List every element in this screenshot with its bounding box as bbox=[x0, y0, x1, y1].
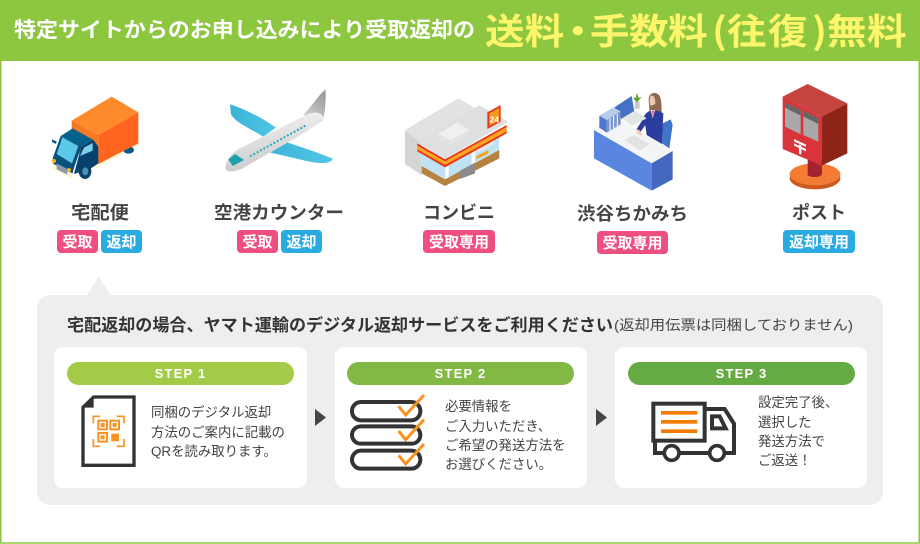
icon: post box bbox=[783, 84, 847, 189]
option: post box bbox=[783, 84, 855, 253]
icon: store bbox=[405, 98, 508, 186]
step 3 text: ご返送！ bbox=[758, 453, 812, 468]
step 3 text bbox=[758, 395, 838, 468]
badge: pickup: 受取 bbox=[62, 233, 93, 251]
badge: return bbox=[281, 230, 322, 253]
step 3 text: 選択した bbox=[758, 415, 812, 430]
header band bbox=[0, 0, 920, 61]
card: step 3 bbox=[615, 347, 867, 488]
step 2 text bbox=[445, 399, 566, 472]
step 2 pill bbox=[347, 362, 574, 385]
arrow 1 bbox=[315, 409, 326, 426]
badge: return: 返却 bbox=[286, 234, 317, 251]
icon: reception desk bbox=[593, 93, 673, 191]
icon: checklist bbox=[352, 395, 424, 469]
badge: pickup bbox=[237, 230, 278, 253]
step 1 pill: STEP 1 bbox=[155, 366, 206, 381]
badge: pickup: 受取 bbox=[242, 233, 273, 251]
step 1 text: QRを読み取ります。 bbox=[151, 444, 277, 459]
label: ポスト bbox=[792, 202, 846, 223]
card: step 1 bbox=[54, 347, 307, 488]
icon: store: 24 bbox=[490, 114, 499, 124]
step 2 pill: STEP 2 bbox=[435, 366, 486, 381]
badge: pickup bbox=[57, 230, 98, 253]
icon: delivery truck bbox=[653, 404, 734, 460]
icon: QR document bbox=[82, 396, 134, 465]
option: convenience store bbox=[405, 98, 508, 253]
card: step 2 bbox=[335, 347, 587, 488]
label: 宅配便 bbox=[71, 203, 129, 223]
label: 空港カウンター bbox=[214, 203, 344, 223]
step 2 text: ご入力いただき、 bbox=[445, 419, 551, 434]
step 2 text: お選びください。 bbox=[445, 457, 552, 472]
arrow 2 bbox=[596, 409, 607, 426]
step 2 text: 必要情報を bbox=[445, 399, 512, 414]
badge: return only: 返却専用 bbox=[789, 233, 849, 251]
label: 渋谷ちかみち bbox=[577, 204, 688, 224]
icon: airplane bbox=[225, 89, 333, 171]
badge: pickup only: 受取専用 bbox=[429, 233, 489, 251]
badge: return bbox=[101, 230, 142, 253]
panel: digital return steps bbox=[37, 276, 883, 505]
badge: pickup only: 受取専用 bbox=[602, 234, 663, 252]
step 1 pill bbox=[67, 362, 294, 385]
option: delivery truck bbox=[52, 97, 142, 253]
badge: return: 返却 bbox=[106, 234, 137, 251]
step 3 text: 設定完了後、 bbox=[758, 395, 838, 410]
panel heading: 宅配返却の場合、ヤマト運輸のデジタル返却サービスをご利用ください bbox=[67, 315, 613, 335]
callout pointer bbox=[87, 276, 111, 296]
step 3 pill: STEP 3 bbox=[716, 366, 767, 381]
option: airport counter bbox=[214, 89, 344, 253]
panel note: (返却用伝票は同梱しておりません) bbox=[614, 317, 853, 333]
icon: truck bbox=[52, 97, 138, 179]
badge: pickup only bbox=[597, 231, 668, 254]
header lead text: 特定サイトからのお申し込みにより受取返却の bbox=[14, 19, 475, 42]
step 1 text: 同梱のデジタル返却 bbox=[151, 404, 271, 420]
badge: return only bbox=[783, 230, 855, 253]
option: Shibuya Chikamichi bbox=[577, 93, 688, 254]
step 2 text: ご希望の発送方法を bbox=[445, 438, 566, 453]
step 3 text: 発送方法で bbox=[758, 434, 825, 449]
step 1 text: 方法のご案内に記載の bbox=[151, 425, 285, 440]
badge: pickup only bbox=[423, 230, 495, 253]
step 1 text bbox=[151, 404, 285, 459]
header highlight text: 送料・手数料(往復)無料 bbox=[485, 2, 907, 54]
label: コンビニ bbox=[423, 202, 495, 223]
step 3 pill bbox=[628, 362, 855, 385]
